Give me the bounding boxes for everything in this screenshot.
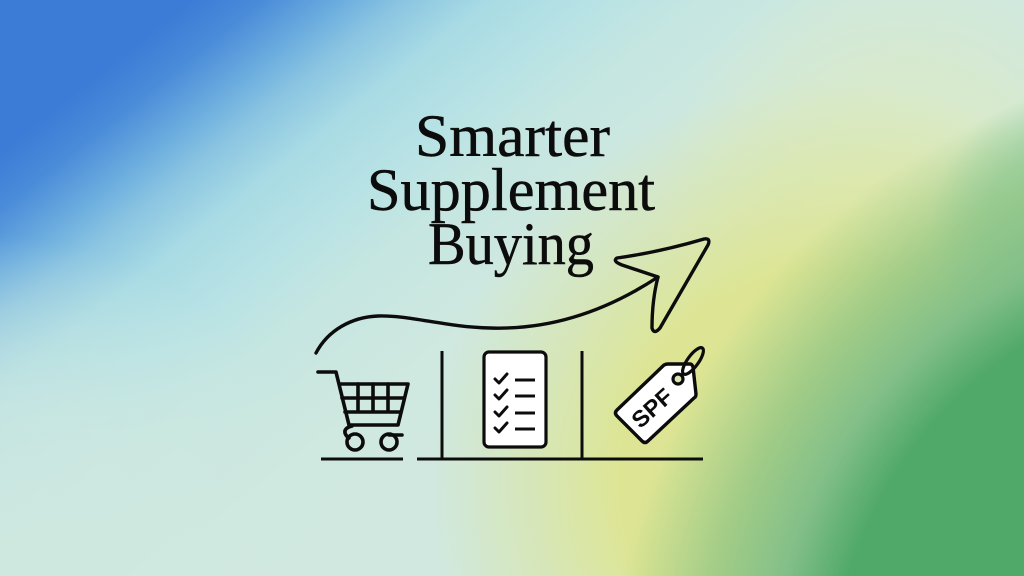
title: Buying [428, 211, 594, 277]
icon: checklist [484, 352, 546, 447]
icon: shopping cart [318, 372, 408, 450]
arrow: rising curve [316, 239, 709, 353]
title [367, 103, 655, 277]
shelf with dividers [417, 351, 703, 459]
title: Smarter [415, 103, 610, 169]
baseline under cart [321, 458, 403, 460]
icon: SPF price tag [616, 345, 707, 442]
icon: SPF price tag: SPF [626, 383, 678, 433]
title: Supplement [367, 157, 655, 223]
